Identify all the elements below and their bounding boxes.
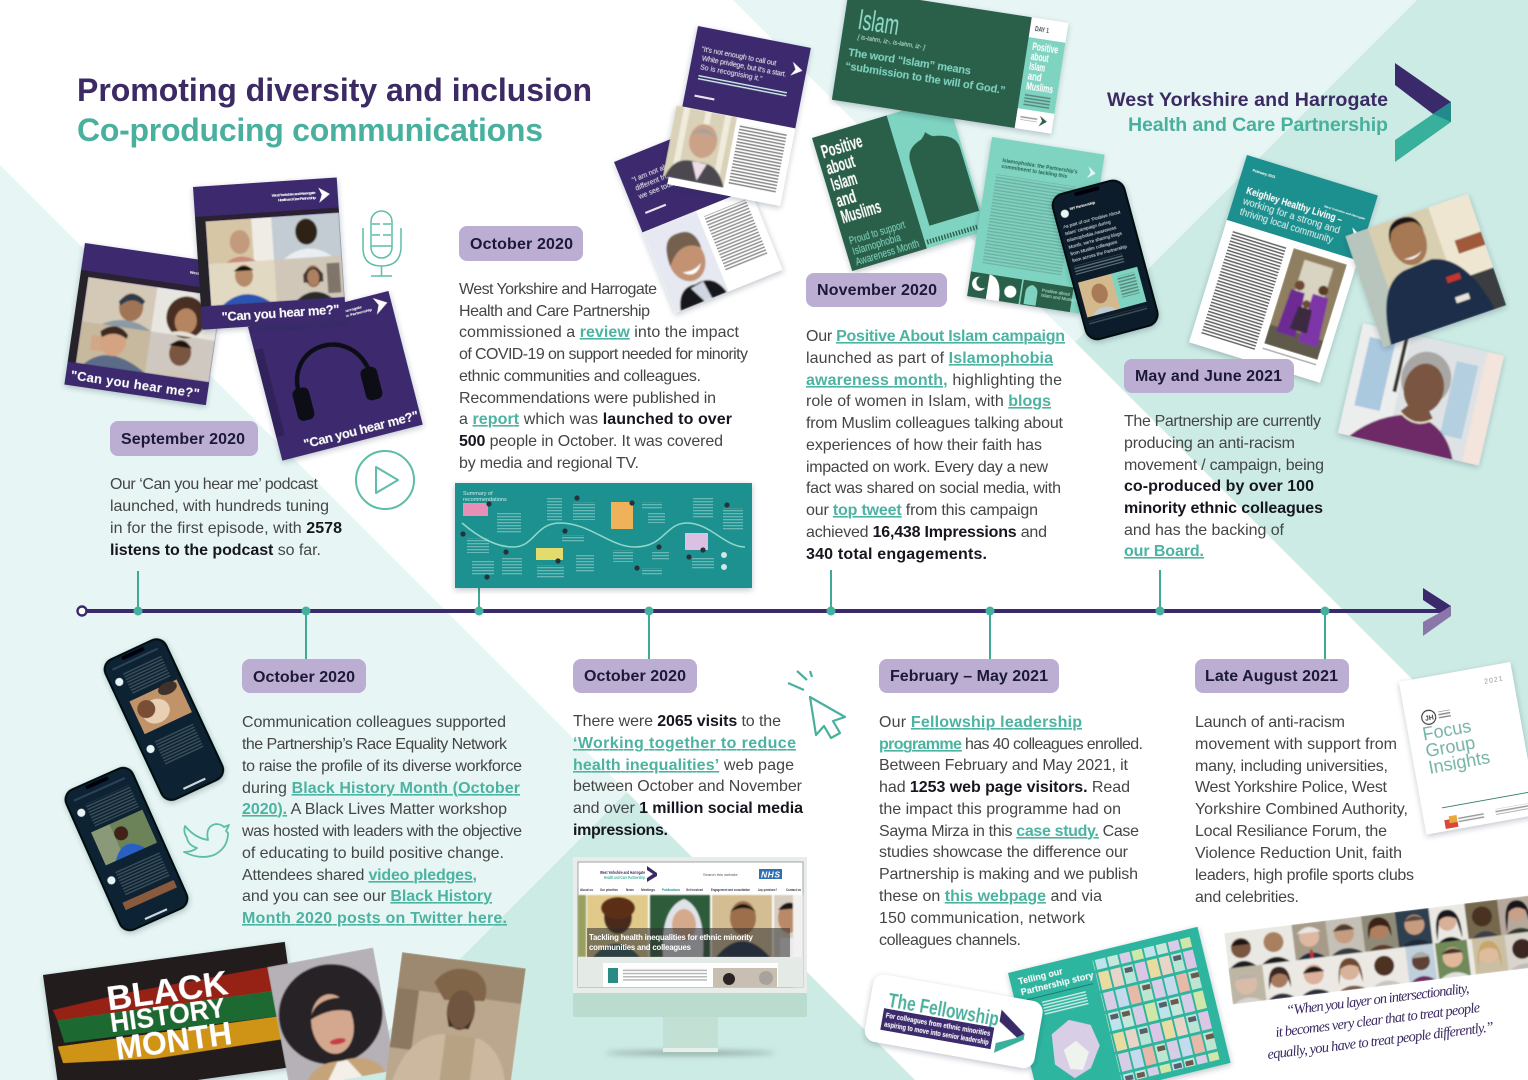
label: September 2020: September 2020 bbox=[121, 431, 245, 448]
Islam definition card: DAY 1 bbox=[1034, 26, 1049, 35]
teal commitment document: Islam and Muslims bbox=[1041, 293, 1079, 303]
text: May and June 2021: and has the backing of bbox=[1124, 522, 1285, 539]
text: November 2020 bbox=[806, 328, 1065, 563]
text: October 2020 review: by media and regional TV. bbox=[459, 455, 639, 472]
web page header: Health and Care Partnership bbox=[604, 875, 645, 880]
text: September 2020: Our ‘Can you hear me’ podcast bbox=[110, 476, 319, 493]
text: October 2020 review: a report which was launched to over bbox=[459, 411, 732, 428]
photo: woman with curly hair bbox=[267, 947, 396, 1080]
teal commitment document: Islamophobia: the Partnership’s bbox=[1002, 158, 1078, 176]
photo grid: people supporting the movement bbox=[1224, 895, 1528, 1004]
text: November 2020: achieved 16,438 Impressions and bbox=[806, 524, 1047, 541]
Focus Group Insights report: Group bbox=[1424, 733, 1477, 761]
text: November 2020: experiences of how their faith has bbox=[806, 437, 1042, 454]
podcast image: headphones card: and Harrogate bbox=[335, 304, 363, 316]
timeline bbox=[78, 570, 1451, 660]
Black History Month banner: BLACK bbox=[104, 964, 231, 1018]
text: February to May 2021: Sayma Mirza in this case study. Case bbox=[879, 823, 1139, 840]
teal commitment document: commitment to tackling this bbox=[1001, 164, 1068, 180]
Keighley Healthy Living case study: Keighley Healthy Living – bbox=[1245, 186, 1344, 226]
Focus Group Insights report: Insights bbox=[1427, 747, 1492, 778]
podcast image: headphones card: "Can you hear me?" bbox=[302, 408, 420, 452]
text: October 2020 Black History Month: 2020). A Black Lives Matter workshop bbox=[242, 801, 507, 818]
text: October 2020 Black History Month: and you can see our Black History bbox=[242, 888, 492, 905]
phone: tweet about campaign: WY Partnership bbox=[1069, 201, 1095, 211]
text: Late August 2021: Local Resiliance Forum, the bbox=[1195, 823, 1387, 840]
icon: headphones bbox=[282, 334, 385, 422]
label: September 2020 bbox=[110, 421, 258, 456]
Positive about Islam poster: about bbox=[824, 151, 857, 179]
text: November 2020: impacted on work. Every day a new bbox=[806, 459, 1048, 476]
web page header: News bbox=[626, 888, 634, 892]
text: October 2020 review: West Yorkshire and Harrogate bbox=[459, 281, 657, 298]
icon: mouse cursor bbox=[788, 671, 845, 738]
web page header: Our priorities bbox=[600, 888, 618, 892]
phone: tweet about campaign: As part of our ‘Positive About bbox=[1063, 209, 1122, 230]
The Fellowship logo card: aspiring to move into senior leadership bbox=[884, 1021, 989, 1047]
Telling our Partnership story card: Telling our bbox=[1017, 966, 1064, 987]
podcast image: video call card centre bbox=[193, 177, 346, 330]
phone: tweet about campaign: from Muslim colleagues bbox=[1070, 239, 1118, 257]
text: October 2020 review: commissioned a review into the impact bbox=[459, 324, 740, 341]
web page header: About us bbox=[580, 888, 593, 892]
text: October 2020 review: ethnic communities and colleagues. bbox=[459, 368, 701, 385]
phone: tweet about campaign: Islam’ campaign during bbox=[1064, 219, 1112, 236]
text: Late August 2021: Yorkshire Combined Authority, bbox=[1195, 801, 1408, 818]
text: May and June 2021: The Partnership are currently bbox=[1124, 413, 1321, 430]
Telling our Partnership story card: Partnership story bbox=[1020, 970, 1095, 997]
label: May and June 2021 bbox=[1124, 359, 1294, 393]
text: February to May 2021: programme has 40 colleagues enrolled. bbox=[879, 736, 1143, 753]
podcast image: video call card centre: "Can you hear me?" bbox=[221, 302, 340, 324]
policy report card: front bbox=[661, 25, 811, 206]
text: Late August 2021: Launch of anti-racism bbox=[1195, 714, 1345, 731]
text: October 2020 Black History Month: Communication colleagues supported bbox=[242, 714, 506, 731]
policy report card: back: different from bbox=[635, 171, 675, 193]
text: February to May 2021: Between February and May 2021, it bbox=[879, 757, 1129, 774]
desktop monitor showing web page: communities and colleagues bbox=[589, 943, 692, 952]
text: May and June 2021: movement / campaign, being bbox=[1124, 457, 1324, 474]
handwritten quote bbox=[1267, 981, 1495, 1063]
Focus Group Insights report bbox=[1399, 662, 1528, 835]
handwritten quote: equally, you have to treat people differently.” bbox=[1267, 1019, 1495, 1063]
text: February to May 2021: Partnership is making and we publish bbox=[879, 866, 1138, 883]
Keighley Healthy Living case study: thriving local community bbox=[1238, 206, 1335, 246]
Positive about Islam poster: Islamophobia bbox=[851, 232, 903, 258]
web page header bbox=[580, 866, 801, 892]
Telling our Partnership story card bbox=[1008, 927, 1231, 1080]
text: February to May 2021 bbox=[879, 714, 1143, 949]
policy report card: back: “I am not always bbox=[631, 158, 681, 184]
web page header: Meetings bbox=[641, 888, 655, 892]
Black History Month banner bbox=[43, 942, 302, 1080]
partnership logo bbox=[1107, 63, 1451, 162]
summary of recommendations graphic: recommendations bbox=[463, 497, 507, 503]
text: February to May 2021: the impact this programme had on bbox=[879, 801, 1121, 818]
Islam definition card: [ is-lahm, iz-, is-lahm, iz- ] bbox=[856, 35, 926, 51]
podcast image: video call card left: "Can you hear me?" bbox=[70, 367, 201, 401]
text: November 2020: awareness month, highlighting the bbox=[806, 372, 1062, 389]
web page header: Publications bbox=[662, 888, 680, 892]
label: November 2020 bbox=[806, 273, 947, 307]
web page hero photos bbox=[578, 895, 803, 987]
phone: tweet about campaign: Islamophobia Awareness bbox=[1066, 225, 1117, 243]
text: October 2020 review: of COVID-19 on support needed for minority bbox=[459, 346, 748, 363]
photo: historic Sikh soldier bbox=[384, 952, 526, 1080]
label: October 2020 Black History Month: October 2020 bbox=[253, 669, 355, 686]
Islam definition card: The word “Islam” means bbox=[847, 47, 972, 78]
text: Late August 2021 bbox=[1195, 714, 1414, 906]
text: February to May 2021: these on this webpage and via bbox=[879, 888, 1102, 905]
title: Promoting diversity and inclusion bbox=[77, 72, 592, 108]
label: Late August 2021 bbox=[1195, 659, 1349, 693]
Focus Group Insights report: JH bbox=[1424, 714, 1434, 723]
text: November 2020: 340 total engagements. bbox=[806, 546, 987, 563]
partnership logo: West Yorkshire and Harrogate bbox=[1107, 89, 1388, 111]
text: February to May 2021: 150 communication, network bbox=[879, 910, 1086, 927]
policy report card: back bbox=[614, 119, 783, 313]
text: October 2020 Black History Month bbox=[241, 714, 522, 927]
text: September 2020: launched, with hundreds tuning bbox=[110, 498, 329, 515]
text: October 2020 web page: between October and November bbox=[573, 778, 803, 795]
label: October 2020 review bbox=[459, 226, 583, 261]
phone: tweet with woman in blue bbox=[62, 764, 191, 934]
Islam definition card: Positive bbox=[1031, 41, 1059, 57]
policy report card: back: we see today bbox=[637, 179, 679, 201]
The Fellowship logo card bbox=[863, 973, 1044, 1070]
text: February to May 2021: had 1253 web page visitors. Read bbox=[879, 779, 1130, 796]
teal commitment document bbox=[967, 137, 1105, 314]
phone: tweet about campaign: from across the Partnership bbox=[1072, 244, 1128, 263]
text: October 2020 web page: There were 2065 visits to the bbox=[573, 713, 781, 730]
phone: tweet about campaign: Month, we’re sharing blogs bbox=[1068, 231, 1123, 250]
text: November 2020: from Muslim colleagues talking about bbox=[806, 415, 1064, 432]
label: May and June 2021: May and June 2021 bbox=[1135, 368, 1282, 385]
label: February to May 2021: February – May 2021 bbox=[890, 668, 1048, 685]
text: October 2020 web page: and over 1 million social media bbox=[573, 800, 803, 817]
text: October 2020 web page bbox=[573, 713, 803, 839]
photo: nurse in navy tunic bbox=[1345, 194, 1506, 348]
Islam definition card bbox=[832, 0, 1068, 134]
The Fellowship logo card: For colleagues from ethnic minorities bbox=[885, 1013, 991, 1038]
desktop monitor showing web page: Tackling health inequalities for ethnic minority bbox=[589, 933, 754, 942]
text: November 2020: fact was shared on social media, with bbox=[806, 480, 1061, 497]
text: October 2020 Black History Month: to raise the profile of its diverse workforce bbox=[242, 758, 522, 775]
text: Late August 2021: movement with support from bbox=[1195, 736, 1397, 753]
text: November 2020: launched as part of Islamophobia bbox=[806, 350, 1053, 367]
icon: microphone bbox=[363, 211, 401, 276]
icon: twitter bird bbox=[184, 824, 229, 857]
text: Late August 2021: many, including universities, bbox=[1195, 758, 1388, 775]
text: October 2020 review: Health and Care Partnership bbox=[459, 303, 650, 320]
text: February to May 2021: colleagues channels. bbox=[879, 932, 1021, 949]
Black History Month banner: MONTH bbox=[113, 1015, 234, 1067]
Keighley Healthy Living case study: West Yorkshire and Harrogate bbox=[1324, 204, 1366, 221]
Focus Group Insights report: 2021 bbox=[1484, 675, 1504, 686]
desktop monitor showing web page bbox=[573, 857, 807, 1055]
Positive about Islam poster: Islam bbox=[829, 168, 859, 195]
podcast image: video call card centre: West Yorkshire and Harrogate bbox=[272, 190, 317, 198]
teal commitment document: Positive about bbox=[1042, 288, 1071, 297]
text: September 2020: listens to the podcast so far. bbox=[110, 542, 321, 559]
web page header: NHS bbox=[761, 870, 780, 880]
label: Late August 2021: Late August 2021 bbox=[1205, 668, 1338, 685]
text: November 2020: role of women in Islam, with blogs bbox=[806, 393, 1051, 410]
Islam definition card: and bbox=[1027, 70, 1042, 84]
label: October 2020 web page bbox=[573, 659, 697, 693]
text: May and June 2021: minority ethnic colleagues bbox=[1124, 500, 1323, 517]
text: May and June 2021: co-produced by over 100 bbox=[1124, 478, 1314, 495]
Positive about Islam poster: Proud to support bbox=[848, 219, 907, 247]
text: Late August 2021: West Yorkshire Police, West bbox=[1195, 779, 1388, 796]
summary of recommendations graphic: Summary of bbox=[463, 491, 493, 497]
icon: play button bbox=[356, 451, 414, 509]
The Fellowship logo card: The Fellowship bbox=[886, 989, 1001, 1031]
policy report card: front: White privilege, but it’s a start. bbox=[701, 55, 787, 79]
Islam definition card: Muslims bbox=[1025, 80, 1054, 96]
Islam definition card: Islam bbox=[1028, 61, 1046, 75]
text: Late August 2021: leaders, high profile sports clubs bbox=[1195, 867, 1414, 884]
label: October 2020 Black History Month bbox=[242, 659, 366, 693]
text: October 2020 web page: ‘Working together to reduce bbox=[573, 735, 796, 752]
Positive about Islam poster: and bbox=[834, 186, 858, 211]
label: November 2020: November 2020 bbox=[817, 282, 937, 299]
text: May and June 2021: our Board. bbox=[1124, 543, 1204, 560]
label: October 2020 web page: October 2020 bbox=[584, 668, 686, 685]
text: October 2020 Black History Month: during Black History Month (October bbox=[242, 780, 520, 797]
label: February to May 2021 bbox=[879, 659, 1059, 693]
phone: tweet about campaign bbox=[1050, 178, 1160, 342]
Positive about Islam poster bbox=[812, 97, 987, 271]
text: February to May 2021: Our Fellowship leadership bbox=[879, 714, 1082, 731]
title: Co-producing communications bbox=[77, 112, 543, 148]
podcast image: video call card centre: Health and Care Partnership bbox=[278, 195, 317, 202]
policy report card: front: So is recognising it.” bbox=[699, 64, 763, 83]
Focus Group Insights report: Focus bbox=[1421, 716, 1473, 744]
Islam definition card: “submission to the will of God.” bbox=[844, 60, 1006, 97]
podcast image: video call card left bbox=[64, 243, 249, 408]
Keighley Healthy Living case study: February 2021 bbox=[1252, 168, 1276, 179]
web page header: West Yorkshire and Harrogate bbox=[600, 870, 645, 875]
text: Late August 2021: Violence Reduction Unit, faith bbox=[1195, 845, 1402, 862]
web page header: Contact us bbox=[786, 888, 801, 892]
text: October 2020 web page: impressions. bbox=[573, 822, 668, 839]
phone: tweet with child photo bbox=[101, 636, 227, 804]
podcast image: headphones card: Care Partnership bbox=[340, 307, 373, 320]
text: October 2020 Black History Month: Attendees shared video pledges, bbox=[242, 867, 477, 884]
text: September 2020 bbox=[110, 476, 342, 559]
Keighley Healthy Living case study bbox=[1189, 155, 1378, 383]
web page header: Get involved bbox=[686, 888, 704, 892]
text: October 2020 review: Recommendations were published in bbox=[459, 390, 716, 407]
Positive about Islam poster: Awareness Month bbox=[854, 238, 921, 268]
podcast image: video call card left: West Yorkshire and Harrogate bbox=[190, 269, 247, 283]
Positive about Islam poster: Positive bbox=[819, 131, 865, 162]
text: October 2020 Black History Month: Month 2020 posts on Twitter here. bbox=[242, 910, 507, 927]
photo: older woman in purple bbox=[1338, 323, 1504, 466]
text: October 2020 review: 500 people in October. It was covered bbox=[459, 433, 723, 450]
text: October 2020 Black History Month: of educating to build positive change. bbox=[242, 845, 504, 862]
text: October 2020 Black History Month: was hosted with leaders with the objective bbox=[241, 823, 522, 840]
summary of recommendations graphic bbox=[455, 483, 752, 588]
web page header: Search this website bbox=[703, 872, 738, 877]
text: September 2020: in for the first episode, with 2578 bbox=[110, 520, 342, 537]
text: November 2020: Our Positive About Islam campaign bbox=[806, 328, 1065, 345]
title bbox=[77, 72, 592, 148]
label: October 2020 review: October 2020 bbox=[470, 236, 573, 253]
partnership logo: Health and Care Partnership bbox=[1128, 114, 1388, 136]
podcast image: headphones card bbox=[248, 291, 423, 461]
Keighley Healthy Living case study: working for a strong and bbox=[1241, 195, 1342, 237]
Positive about Islam poster: Muslims bbox=[838, 197, 883, 228]
text: October 2020 web page: health inequalities’ web page bbox=[573, 757, 794, 774]
Black History Month banner: HISTORY bbox=[108, 992, 227, 1038]
handwritten quote: “When you layer on intersectionality, bbox=[1286, 981, 1470, 1019]
handwritten quote: it becomes very clear that to treat people bbox=[1275, 1000, 1482, 1041]
web page header: Engagement and consultation bbox=[711, 888, 750, 892]
text: May and June 2021 bbox=[1124, 413, 1324, 560]
text: February to May 2021: studies showcase the difference our bbox=[879, 844, 1129, 861]
text: November 2020: our top tweet from this campaign bbox=[806, 502, 1038, 519]
text: October 2020 Black History Month: the Partnership’s Race Equality Network bbox=[242, 736, 508, 753]
web page header: Any questions? bbox=[758, 888, 777, 892]
text: May and June 2021: producing an anti-racism bbox=[1124, 435, 1295, 452]
Islam definition card: Islam bbox=[856, 4, 901, 42]
text: Late August 2021: and celebrities. bbox=[1195, 889, 1299, 906]
text: October 2020 review bbox=[459, 281, 748, 472]
Islam definition card: about bbox=[1030, 51, 1050, 65]
policy report card: front: “It’s not enough to call out bbox=[701, 46, 777, 68]
